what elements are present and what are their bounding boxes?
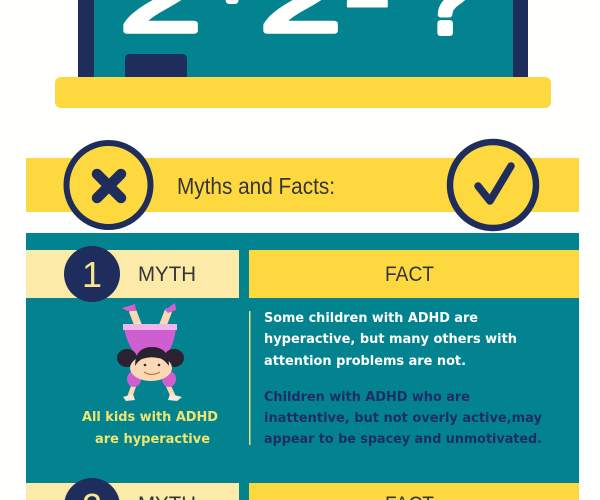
myth statement bbox=[82, 409, 218, 447]
chalk tray bbox=[55, 77, 551, 108]
fact header bbox=[249, 483, 579, 500]
fact text: white: hyperactive, but many others with bbox=[264, 331, 517, 347]
number badge 2 bbox=[64, 478, 120, 500]
myth header bbox=[26, 483, 239, 500]
fact text: navy bbox=[264, 389, 542, 447]
fact text: navy: inattentive, but not overly active,may bbox=[264, 410, 542, 426]
fact text: white: attention problems are not. bbox=[264, 353, 466, 369]
number badge 1: 1 bbox=[82, 254, 102, 295]
icon: check in circle bbox=[450, 142, 536, 228]
banner: myths and facts bbox=[26, 142, 579, 228]
heading: Myths and Facts: bbox=[177, 173, 335, 199]
number badge 1 bbox=[64, 246, 120, 302]
panel: myth and fact 2 (cropped) bbox=[26, 478, 579, 500]
myth statement: are hyperactive bbox=[95, 431, 210, 447]
illustration: girl doing handstand bbox=[117, 303, 184, 401]
fact text: white bbox=[264, 310, 517, 369]
chalkboard illustration bbox=[55, 0, 551, 108]
eraser bbox=[125, 54, 187, 77]
myth statement: All kids with ADHD bbox=[82, 409, 218, 425]
fact header: FACT bbox=[385, 262, 434, 286]
panel: myth and fact 1 bbox=[26, 233, 579, 500]
chalk equation bbox=[123, 0, 466, 36]
fact text: navy: appear to be spacey and unmotivated. bbox=[264, 431, 542, 447]
fact header bbox=[249, 250, 579, 298]
myth header: MYTH bbox=[138, 262, 196, 286]
myth header bbox=[26, 250, 239, 298]
fact text: navy: Children with ADHD who are bbox=[264, 389, 470, 405]
fact text: white: Some children with ADHD are bbox=[264, 310, 478, 326]
icon: cross in circle bbox=[66, 143, 150, 227]
